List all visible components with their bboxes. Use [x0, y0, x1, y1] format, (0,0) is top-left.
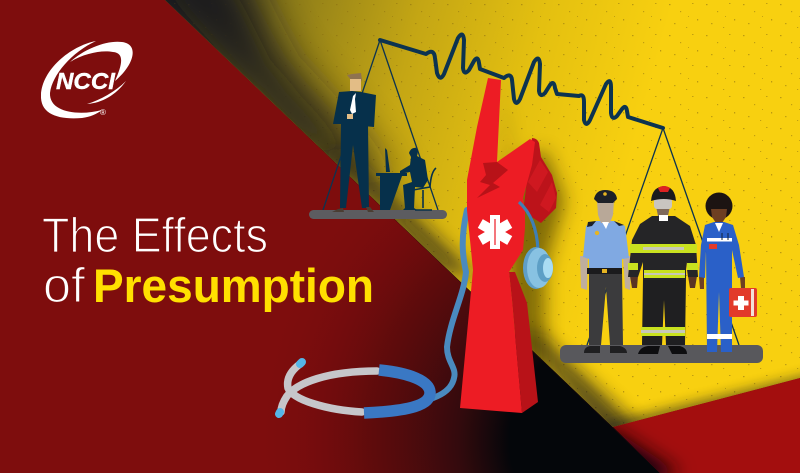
hand front [460, 78, 535, 413]
chest badge [595, 231, 599, 235]
tie [350, 93, 356, 114]
cap badge [603, 192, 607, 196]
forearms [580, 256, 631, 290]
face visor [654, 198, 672, 209]
right scale platform [560, 345, 763, 363]
left scale cords [323, 40, 438, 210]
chair [413, 168, 436, 210]
star of life [478, 215, 512, 249]
NCCI logo [41, 41, 133, 118]
businessman figure [332, 73, 376, 212]
coat [628, 216, 698, 280]
background: dark red panel [165, 0, 800, 473]
worker [400, 148, 428, 210]
boots [638, 346, 687, 354]
trousers [340, 123, 369, 208]
logo wordmark: NCCI [56, 68, 116, 94]
chest stripe [707, 238, 732, 242]
blue headset [364, 370, 430, 413]
face [597, 201, 614, 223]
desk [376, 173, 407, 210]
logo swoosh: thin tail [87, 81, 126, 104]
fist fold shadow [477, 162, 508, 198]
background: lower right red panel [600, 378, 800, 473]
chin [656, 206, 670, 216]
red hand [460, 78, 557, 413]
logo swoosh: right arc [70, 42, 133, 81]
shoes [584, 346, 627, 353]
title word: of: of [43, 259, 85, 313]
chest piece disc [523, 247, 549, 289]
logo swoosh: left arc [41, 41, 102, 118]
neck stethoscope [722, 233, 728, 240]
right scale cords [587, 128, 739, 345]
title word: Presumption: Presumption [93, 259, 374, 312]
logo registered mark: ® [100, 108, 106, 117]
shirt [583, 221, 629, 270]
ankle stripes [707, 334, 732, 339]
shoulder straps [587, 221, 624, 227]
kit edge [751, 289, 754, 316]
background: yellow spotlight panel [165, 0, 800, 427]
fist fingers [524, 138, 557, 223]
stripe centres [641, 247, 685, 333]
scale beam: heartbeat line [380, 34, 663, 128]
helmet red crest [658, 186, 670, 192]
title line one: The Effects [42, 209, 268, 263]
shoes [332, 207, 374, 212]
hair [706, 192, 732, 220]
chest piece tube [519, 202, 538, 250]
collar [602, 222, 609, 229]
main tube [433, 210, 467, 398]
first aid kit [729, 288, 757, 317]
suit [699, 222, 744, 352]
trousers [589, 270, 623, 345]
id badge [709, 244, 717, 249]
helmet [651, 186, 676, 201]
left scale platform [309, 210, 447, 219]
police officer [580, 190, 631, 353]
cap [594, 190, 617, 203]
collar [715, 223, 723, 232]
grey ear tube one [281, 371, 377, 412]
stethoscope [279, 210, 467, 414]
hands [699, 277, 745, 289]
reflective stripes [628, 244, 698, 336]
belt buckle [602, 269, 607, 273]
trousers [642, 278, 686, 345]
title [42, 209, 374, 313]
hand side [509, 272, 538, 413]
office worker at desk [376, 148, 436, 210]
kit cross [734, 296, 748, 310]
ear tips [279, 362, 302, 414]
belt [587, 268, 622, 274]
paramedic [699, 192, 757, 352]
jacket [333, 91, 376, 127]
finger creases [528, 160, 556, 212]
firefighter [628, 186, 698, 354]
collar [659, 215, 668, 221]
hair [347, 73, 362, 82]
monitor [385, 148, 390, 172]
hands [630, 276, 697, 288]
grey ear tube two [288, 364, 362, 412]
face [350, 79, 361, 91]
face [711, 209, 727, 223]
hand [347, 114, 353, 119]
stethoscope chest piece [519, 202, 553, 289]
